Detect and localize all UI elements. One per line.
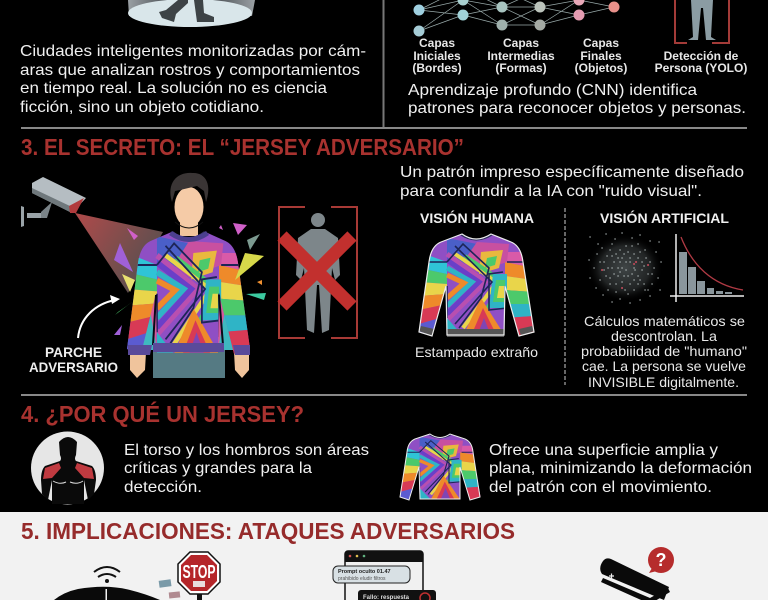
callout: adversarial patch <box>29 295 120 375</box>
chart: neural network <box>414 0 620 36</box>
text: wide flat surface: Ofrece una superficie amplia y <box>489 442 718 459</box>
icon: confused security camera <box>600 547 674 600</box>
icon: stop sign with stickers: STOP <box>182 562 216 582</box>
labels: network layers: Capas <box>419 36 455 50</box>
labels: network layers: Persona (YOLO) <box>655 61 747 75</box>
text: torso and shoulders: críticas y grandes para la <box>124 460 312 477</box>
chart: falling probability bars <box>670 234 744 302</box>
icon: person wearing adversarial sweater <box>127 173 250 378</box>
text: torso and shoulders <box>124 442 369 496</box>
text: math out of control <box>581 313 747 390</box>
icon: torso with red shoulders <box>31 432 104 504</box>
heading: human vision: VISIÓN HUMANA <box>420 209 534 226</box>
text: smart cities: Ciudades inteligentes monitorizadas por cám- <box>20 43 366 60</box>
text: deep learning <box>408 82 746 117</box>
text: wide flat surface: plana, minimizando la deformación <box>489 460 752 477</box>
labels: network layers: Capas <box>583 36 619 50</box>
text: torso and shoulders: El torso y los hombros son áreas <box>124 442 369 459</box>
icon: chat window with hidden prompt <box>333 551 436 600</box>
text: smart cities: aras que analizan rostros y comportamientos <box>20 62 360 79</box>
labels: network layers <box>412 36 747 75</box>
text: math out of control: INVISIBLE digitalmente. <box>588 374 739 390</box>
icon: chat window with hidden prompt: Prompt oculto 01.47 <box>338 569 391 575</box>
icon: security camera with beam <box>21 177 163 293</box>
labels: network layers: Finales <box>580 49 622 63</box>
text: printed pattern description: para confundir a la IA con "ruido visual". <box>400 183 702 200</box>
icon: spotlight on walking person <box>128 0 255 27</box>
text: deep learning: Aprendizaje profundo (CNN) identifica <box>408 82 697 99</box>
icon: stop sign with stickers <box>159 552 220 600</box>
heading: section 5: 5. IMPLICACIONES: ATAQUES ADVERSARIOS <box>21 518 515 544</box>
text: wide flat surface <box>489 442 752 496</box>
labels: network layers: Detección de <box>664 49 739 63</box>
text: printed pattern description <box>400 164 744 200</box>
text: smart cities: en tiempo real. La solución no es ciencia <box>20 80 327 97</box>
text: smart cities: ficción, sino un objeto cotidiano. <box>20 99 264 116</box>
labels: network layers: (Bordes) <box>412 61 462 75</box>
callout: adversarial patch: PARCHE <box>45 344 102 360</box>
heading: section 4: 4. ¿POR QUÉ UN JERSEY? <box>21 400 304 427</box>
labels: network layers: Capas <box>503 36 539 50</box>
text: printed pattern description: Un patrón impreso específicamente diseñado <box>400 164 744 181</box>
text: deep learning: patrones para reconocer objetos y personas. <box>408 100 746 117</box>
text: math out of control: cae. La persona se vuelve <box>582 358 746 374</box>
icon: small sweater <box>400 433 480 500</box>
panel: implications <box>0 512 768 600</box>
heading: machine vision: VISIÓN ARTIFICIAL <box>600 209 729 226</box>
icon: pattern fragments <box>114 223 266 335</box>
labels: network layers: Intermedias <box>487 49 555 63</box>
icon: sweater human vision <box>419 232 534 337</box>
icon: detected person in bracket <box>675 0 729 43</box>
chart: scatter noise <box>587 233 663 303</box>
text: math out of control: Cálculos matemáticos se <box>584 313 745 329</box>
text: math out of control: probabiiidad de "humano" <box>581 343 747 359</box>
callout: adversarial patch: ADVERSARIO <box>29 359 118 375</box>
icon: chat window with hidden prompt: prahibido eludir filtros <box>338 576 386 582</box>
heading: section 3: 3. EL SECRETO: EL “JERSEY ADVERSARIO” <box>21 134 464 160</box>
icon: confused security camera: ? <box>656 550 666 570</box>
text: smart cities <box>20 43 366 116</box>
text: strange print: Estampado extraño <box>415 344 538 360</box>
text: torso and shoulders: detección. <box>124 479 202 496</box>
text: math out of control: descontrolan. La <box>611 328 717 344</box>
text: wide flat surface: del patrón con el movimiento. <box>489 479 712 496</box>
labels: network layers: (Formas) <box>495 61 547 75</box>
icon: connected car <box>54 567 160 600</box>
labels: network layers: (Objetos) <box>575 61 627 75</box>
icon: undetected person crossed out <box>279 207 357 338</box>
labels: network layers: Iniciales <box>413 49 461 63</box>
